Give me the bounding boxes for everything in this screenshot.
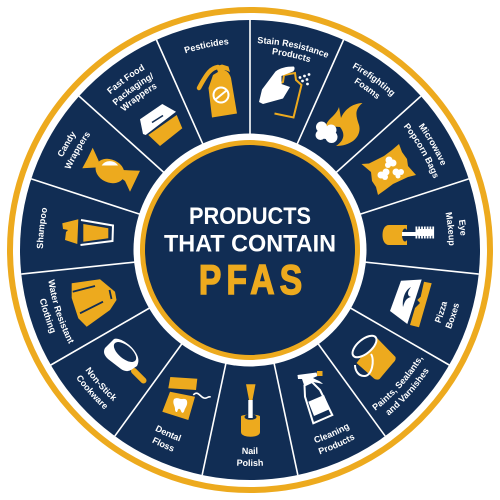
panel: firefighting foams [316,62,395,146]
panel: water resistant clothing [40,279,116,344]
icon: hand with aerosol can [259,66,310,118]
title: PFAS [199,258,302,304]
label: dental floss: Dental [155,425,182,442]
label: non-stick cookware: Cookware [77,376,107,409]
icon: spray bottle with prohibition sign [199,64,237,118]
label: microwave popcorn bags: Popcorn Bags [404,123,438,178]
label: fast food packaging / wrappers: Packaging/ [112,72,154,106]
icon: pan [104,338,144,380]
panel: pesticides [184,39,237,118]
label: dental floss [152,425,182,452]
label: cleaning products [314,424,354,454]
label: microwave popcorn bags: Microwave [418,123,446,166]
label: candy wrappers: Candy [58,131,76,156]
icon: nail polish bottle [241,384,260,437]
icon: dental floss box [162,377,211,420]
panel: stain resistance products [258,37,328,119]
title: PRODUCTS [189,203,311,230]
label: candy wrappers: Wrappers [64,132,90,168]
panel: fast food packaging / wrappers [106,64,182,146]
label: dental floss: Floss [152,437,174,452]
icon: pizza box [390,280,432,327]
icon: flame and foam [316,103,362,146]
icon: mascara wand [382,225,435,245]
title: THAT CONTAIN [164,230,336,258]
panel: non-stick cookware [77,338,146,409]
icon: fast food box [140,104,182,146]
title [164,203,336,304]
panel: microwave popcorn bags [362,123,446,195]
center circle [134,134,366,366]
label: paints, sealants, and varnishes: Paints, Sealants, [372,358,424,410]
label: nail polish: Polish [237,459,263,466]
label: water resistant clothing: Water Resistant [48,279,74,344]
label: fast food packaging / wrappers [106,64,157,111]
label: stain resistance products: Products [272,48,310,62]
label: eye makeup: Eye [458,220,466,236]
label: pizza boxes [434,302,459,329]
label: eye makeup [446,212,466,246]
panel: pizza boxes [390,280,459,329]
label: firefighting foams: Foams [354,78,380,99]
icon: shampoo bottle [62,219,113,245]
label: cleaning products: Cleaning [314,424,350,442]
label: firefighting foams: Firefighting [352,62,395,97]
label: non-stick cookware: Non-Stick [86,366,116,402]
label: water resistant clothing: Clothing [40,298,56,334]
panel: eye makeup [382,212,466,246]
label: pesticides: Pesticides [184,39,228,54]
icon: popcorn bag [362,144,416,195]
label: nail polish [237,447,263,466]
icon: jacket [72,279,116,327]
panel: shampoo [36,208,114,249]
label: shampoo: Shampoo [36,208,47,249]
label: cleaning products: Products [318,435,354,454]
panel: cleaning products [298,371,354,454]
label: pizza boxes: Pizza [434,302,448,323]
label: stain resistance products: Stain Resistance [258,37,328,58]
label: eye makeup: Makeup [446,212,454,246]
label: nail polish: Nail [242,447,258,454]
panel: paints, sealants, and varnishes [352,334,428,416]
icon: candy [82,148,140,192]
panel: nail polish [237,384,263,466]
panel: candy wrappers [58,131,140,192]
icon: paint bucket [349,332,396,380]
label: fast food packaging / wrappers: Fast Food [106,64,145,94]
panel: dental floss [152,377,211,452]
label: pizza boxes: Boxes [445,304,459,329]
label: paints, sealants, and varnishes: and Varnishes [386,368,428,416]
label: fast food packaging / wrappers: Wrappers [120,84,157,111]
icon: spray bottle [298,371,332,423]
label: non-stick cookware [77,366,116,409]
